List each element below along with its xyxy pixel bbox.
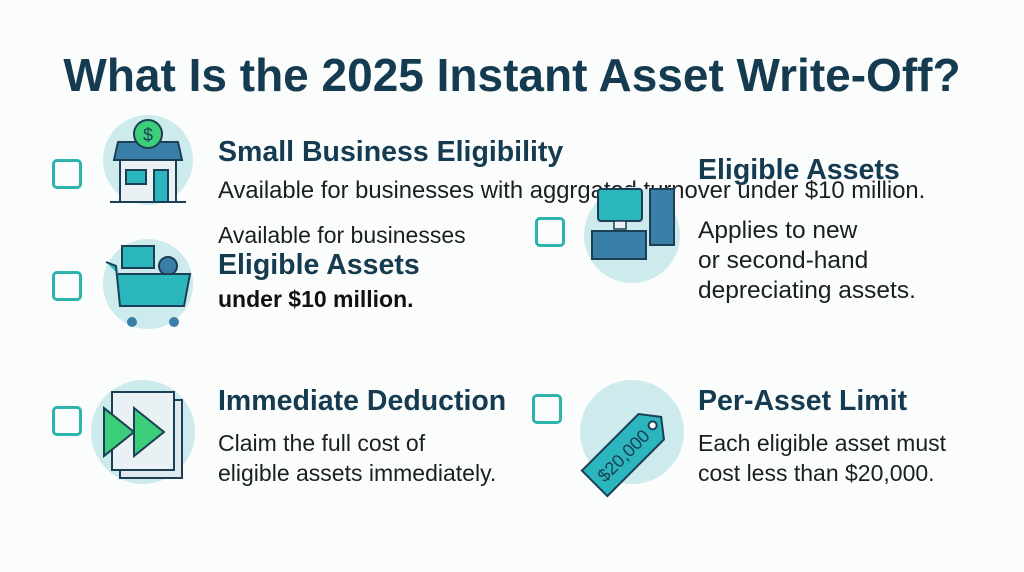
- heading: immediate deduction: Immediate Deduction: [218, 385, 506, 417]
- checkbox 1: [52, 159, 82, 189]
- checkbox 5: [532, 394, 562, 424]
- icon: price tag: $20,000: [594, 426, 654, 486]
- text: claim full cost: eligible assets immediately.: [218, 460, 496, 486]
- text: turnover: Available for businesses with aggrgated turnover under $10 million.: [218, 177, 925, 204]
- icon: storefront: $: [143, 125, 153, 145]
- text: each eligible asset: Each eligible asset must: [698, 430, 946, 456]
- heading: per-asset limit: Per-Asset Limit: [698, 385, 907, 417]
- text: applies to: or second-hand: [698, 247, 868, 274]
- icon: computer: [584, 187, 680, 283]
- text: applies to: [698, 217, 916, 304]
- text: available for businesses: Available for businesses: [218, 222, 466, 248]
- text: claim full cost: [218, 430, 496, 486]
- heading: eligible assets right: Eligible Assets: [698, 154, 900, 186]
- text: each eligible asset: cost less than $20,000.: [698, 460, 935, 486]
- icon: shopping cart: [103, 239, 193, 329]
- text: applies to: depreciating assets.: [698, 277, 916, 304]
- icon: storefront: [103, 115, 193, 205]
- text: under 10 million: under $10 million.: [218, 286, 414, 312]
- title: What Is the 2025 Instant Asset Write-Off?: [63, 49, 961, 101]
- icon: price tag: [580, 380, 684, 498]
- checkbox 2: [52, 271, 82, 301]
- heading: small business eligibility: Small Business Eligibility: [218, 136, 563, 168]
- checkbox 4: [52, 406, 82, 436]
- checkbox 3: [535, 217, 565, 247]
- heading: eligible assets left: Eligible Assets: [218, 249, 420, 281]
- text: claim full cost: Claim the full cost of: [218, 430, 425, 456]
- icon: fast forward documents: [91, 380, 195, 484]
- text: applies to: Applies to new: [698, 217, 857, 244]
- text: each eligible asset: [698, 430, 946, 486]
